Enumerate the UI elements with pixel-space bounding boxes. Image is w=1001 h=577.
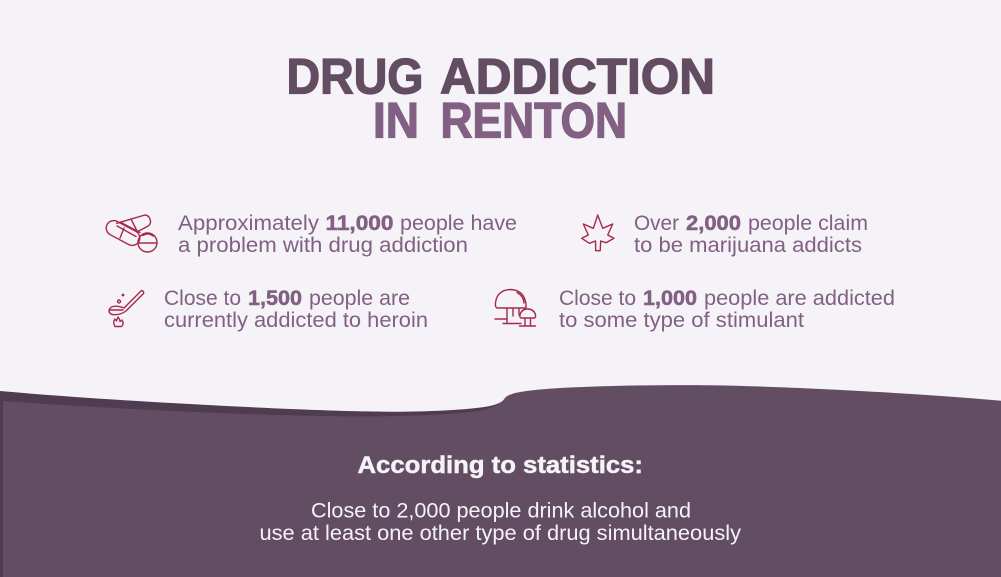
- stat: heroin: 1,500: [248, 287, 302, 310]
- title: DRUG: [286, 49, 424, 105]
- stat: stimulant: Close to: [559, 287, 636, 310]
- stat: drug addiction: a problem with drug addiction: [178, 234, 468, 257]
- icon: spoon and flame: [109, 290, 144, 326]
- title: RENTON: [440, 92, 627, 148]
- icon: pills: [104, 215, 157, 252]
- icon: marijuana leaf: [582, 215, 614, 251]
- stat: stimulant: to some type of stimulant: [559, 309, 804, 332]
- title: [286, 49, 715, 148]
- stat: marijuana: Over: [634, 212, 679, 235]
- stat: stimulant: 1,000: [643, 287, 697, 310]
- stat: marijuana: people claim: [748, 212, 868, 235]
- icon: mushrooms: [495, 290, 536, 326]
- stat: heroin: currently addicted to heroin: [164, 309, 428, 332]
- stat: marijuana: 2,000: [686, 212, 741, 235]
- stat: drug addiction: people have: [400, 212, 517, 235]
- bottom panel text: [260, 500, 742, 545]
- title: IN: [373, 92, 419, 148]
- stat: drug addiction: Approximately: [178, 212, 320, 235]
- stat: drug addiction: [178, 212, 517, 257]
- stat: heroin: people are: [309, 287, 410, 310]
- stat: marijuana: to be marijuana addicts: [634, 234, 862, 257]
- bottom panel text: use at least one other type of drug simultaneously: [260, 522, 742, 545]
- stat: stimulant: people are addicted: [704, 287, 895, 310]
- stat: stimulant: [559, 287, 895, 332]
- stat: heroin: [164, 287, 428, 332]
- bottom panel: wave background: [0, 385, 1001, 577]
- bottom panel heading: According to statistics:: [358, 452, 643, 479]
- bottom panel text: Close to 2,000 people drink alcohol and: [311, 500, 691, 522]
- stat: heroin: Close to: [164, 287, 241, 310]
- stat: marijuana: [634, 212, 868, 257]
- stat: drug addiction: 11,000: [326, 212, 394, 235]
- title: ADDICTION: [440, 49, 715, 105]
